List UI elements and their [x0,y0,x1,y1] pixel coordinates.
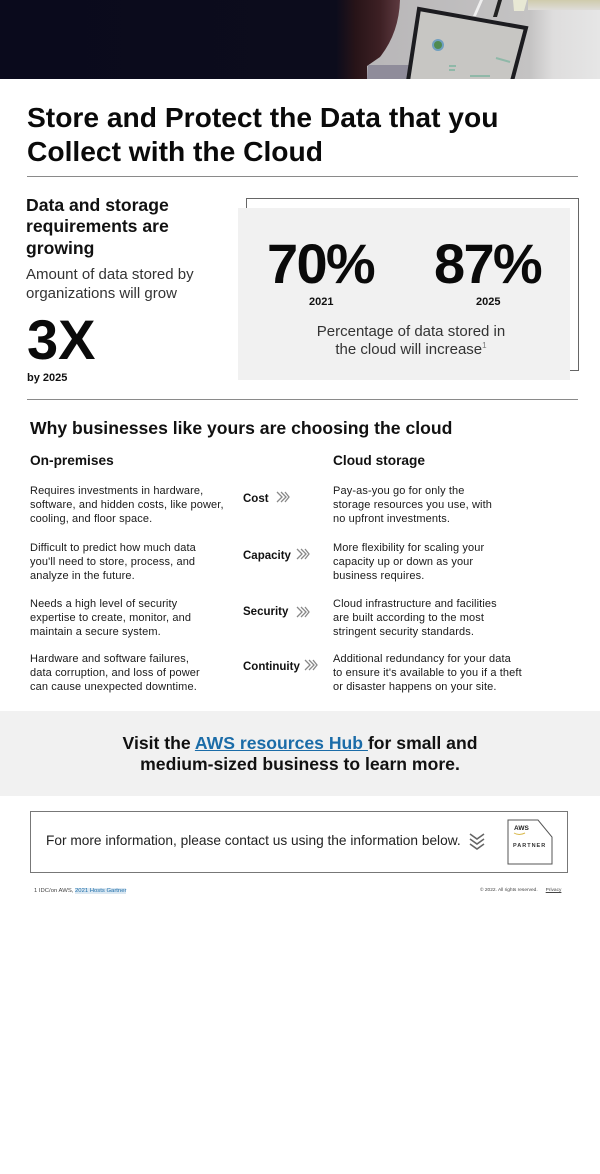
label: cost: Cost [243,493,269,505]
cloud: cost: Pay-as-you go for only the [333,485,465,497]
banner text: medium-sized business to learn more. [140,754,460,774]
on-premises: continuity [30,653,200,693]
stat: 3X: 3X [27,308,96,371]
on-premises: cost: cooling, and floor space. [30,513,152,525]
footer: copyright and privacy: © 2022. All rights reserved. Privacy [480,888,561,893]
on-premises: security: maintain a secure system. [30,626,161,638]
panel frame [246,198,579,370]
text: percentage increase: Percentage of data stored in [317,323,505,340]
heading: data growing: Data and storage [26,195,169,215]
cloud: security: are built according to the most [333,612,484,624]
icon: capacity chevrons [296,548,310,560]
text: amount of data: organizations will grow [26,284,177,302]
comparison table [30,453,522,693]
panel: data growth [26,195,194,384]
on-premises: continuity: can cause unexpected downtime. [30,681,197,693]
title: Store and Protect the Data that you [27,101,498,133]
heading: data growing [26,195,169,258]
heading: data growing: requirements are [26,216,169,236]
stat: 70 percent: 70% [267,232,374,295]
cloud: capacity [333,542,484,582]
title [27,101,498,167]
title: Collect with the Cloud [27,135,323,167]
cloud: security [333,598,497,638]
banner: visit AWS resources hub [0,711,600,796]
footer: source note: 1 IDC/on AWS, 2021 Hosts Gartner [34,888,126,894]
contact text: For more information, please contact us using the information below. [46,833,461,848]
on-premises: security: Needs a high level of security [30,598,177,610]
cloud: capacity: More flexibility for scaling your [333,542,484,554]
banner text: Visit the AWS resources Hub for small and [123,733,477,753]
cloud: security: stringent security standards. [333,626,474,638]
on-premises: capacity [30,542,196,582]
column heading: cloud storage: Cloud storage [333,453,425,468]
badge: AWS partner: AWS [514,825,529,832]
panel background [238,208,570,380]
on-premises: capacity: analyze in the future. [30,570,135,582]
label: 2021: 2021 [309,296,333,308]
stat: 87 percent: 87% [434,232,541,295]
icon: down chevrons [470,834,484,850]
contact box [30,811,568,873]
cloud: cost [333,485,492,525]
title divider [27,176,578,177]
text: amount of data: Amount of data stored by [26,266,194,283]
text: percentage increase [317,323,505,358]
on-premises: capacity: Difficult to predict how much data [30,542,196,554]
cloud: continuity: Additional redundancy for your data [333,653,511,665]
cloud: security: Cloud infrastructure and facilities [333,598,497,610]
badge: AWS partner [508,820,552,864]
label: by 2025: by 2025 [27,372,67,384]
label: 2025: 2025 [476,296,500,308]
on-premises: capacity: you'll need to store, process, and [30,556,195,568]
on-premises: security [30,598,191,638]
cloud: cost: no upfront investments. [333,513,450,525]
on-premises: cost [30,485,224,525]
on-premises: security: expertise to create, monitor, and [30,612,191,624]
label: security: Security [243,606,288,618]
heading: why businesses: Why businesses like yours are choosing the cloud [30,418,452,438]
panel frame corner [568,370,579,371]
text: amount of data [26,266,194,302]
cloud: continuity [333,653,522,693]
heading: data growing: growing [26,238,94,258]
on-premises: cost: Requires investments in hardware, [30,485,203,497]
column heading: on-premises: On-premises [30,453,114,468]
cloud: continuity: or disaster happens on your site. [333,681,497,693]
on-premises: cost: software, and hidden costs, like power, [30,499,224,511]
section divider [27,399,578,400]
cloud: capacity: capacity up or down as your [333,556,473,568]
on-premises: continuity: data corruption, and loss of power [30,667,200,679]
label: capacity: Capacity [243,550,291,562]
banner text [122,733,477,774]
cloud: cost: storage resources you use, with [333,499,492,511]
icon: continuity chevrons [304,660,318,670]
hero image: monitor on desk [0,0,600,79]
cloud: continuity: to ensure it's available to you if a theft [333,667,522,679]
on-premises: continuity: Hardware and software failures, [30,653,189,665]
label: continuity: Continuity [243,661,300,673]
badge: AWS partner: PARTNER [513,843,546,849]
panel: cloud percentage [238,198,579,380]
icon: security chevrons [296,606,310,618]
icon: cost chevrons [276,492,290,502]
cloud: capacity: business requires. [333,570,424,582]
text: percentage increase: the cloud will increase1 [335,341,487,358]
